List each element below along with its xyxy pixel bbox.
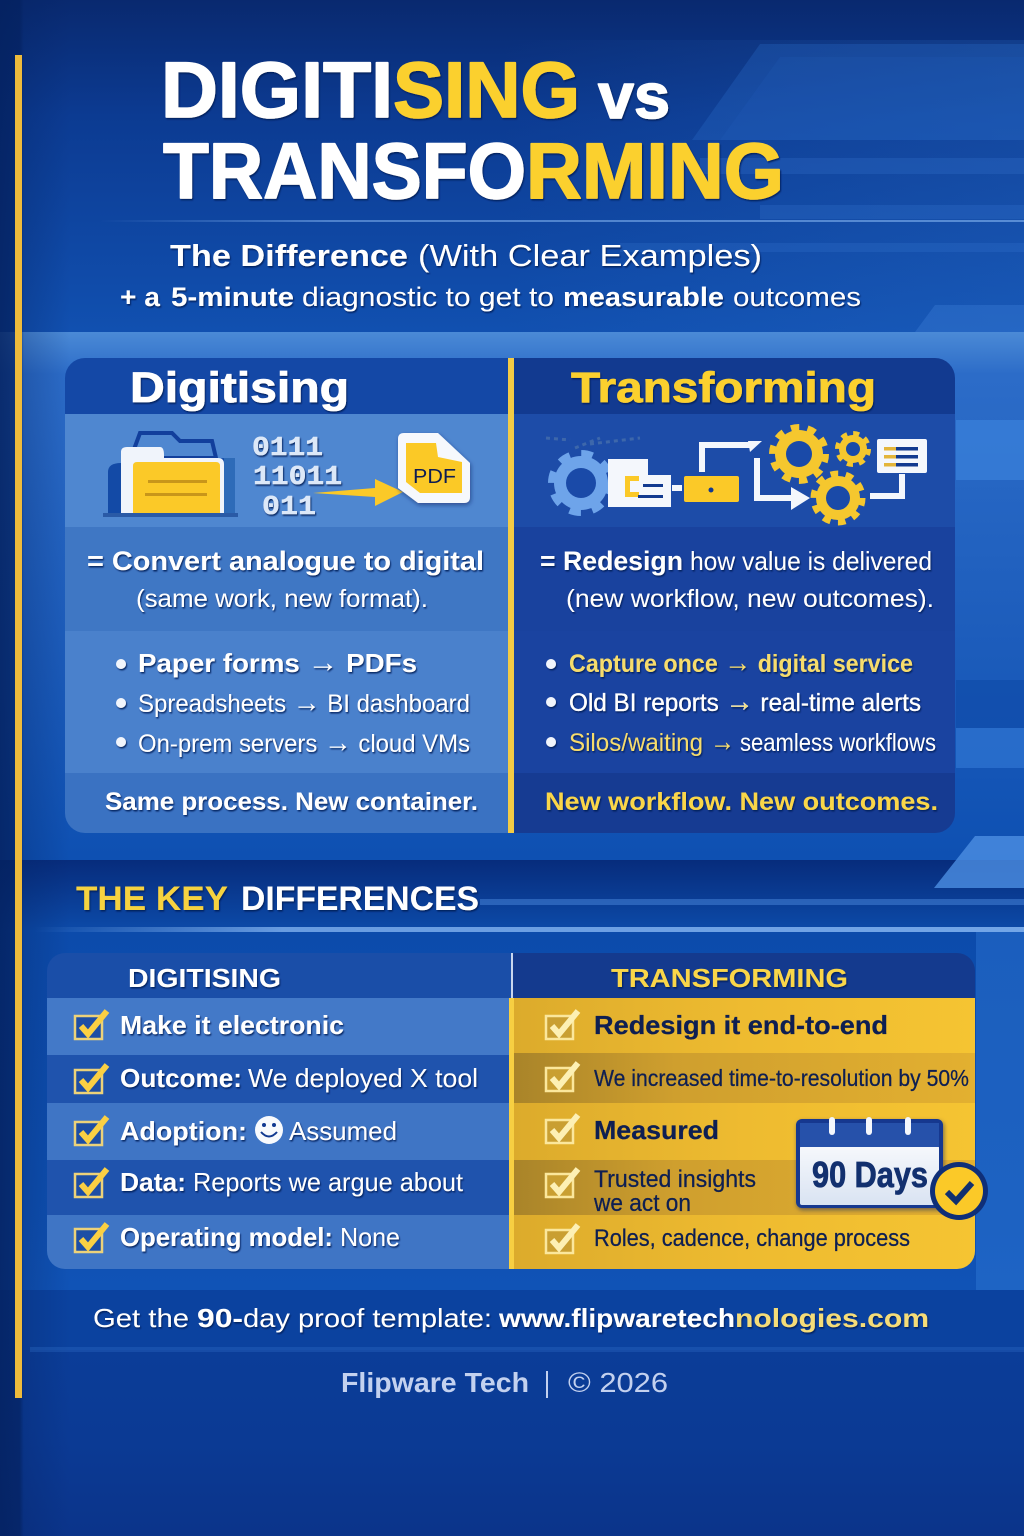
gear: large yellow: [773, 428, 825, 480]
bullets: transforming: Old BI reports → real-time alerts: [569, 686, 921, 718]
rows: transforming: Measured: [594, 1115, 719, 1145]
badge: check: [930, 1162, 988, 1220]
column heading: digitising: DIGITISING: [128, 963, 281, 993]
arrow: binary to pdf: [313, 479, 403, 506]
subtitle: outcomes: [733, 282, 861, 312]
binary digits: 0111: [252, 434, 323, 464]
definition: digitising: (same work, new format).: [136, 585, 428, 613]
rows: digitising: Assumed: [289, 1116, 397, 1146]
rows: transforming: Roles, cadence, change process: [594, 1225, 910, 1252]
call to action: www.flipwaretech: [498, 1303, 735, 1333]
rows: digitising: Reports we argue about: [193, 1167, 464, 1197]
footer: [341, 1367, 668, 1398]
column heading: transforming: TRANSFORMING: [611, 963, 848, 993]
call to action: 90-: [197, 1303, 243, 1333]
definition: transforming: how value is delivered: [690, 546, 932, 576]
icon: 90 days calendar: 90 Days: [812, 1154, 928, 1195]
binary digits: 11011: [253, 463, 342, 493]
rows: transforming: [593, 1010, 969, 1252]
rows: transforming: Trusted insights: [594, 1166, 756, 1193]
bullets: transforming: [546, 647, 936, 758]
heading: digitising: Digitising: [130, 364, 349, 412]
arrow: down to gears: [757, 458, 810, 510]
icon: folder: [103, 433, 238, 517]
footer: Flipware Tech: [341, 1367, 529, 1398]
bullets: transforming: →: [710, 726, 735, 758]
definition: digitising: [87, 546, 484, 613]
subtitle: [120, 238, 861, 312]
panel divider: [508, 358, 514, 833]
rows: transforming: We increased time-to-resolution by 50%: [594, 1065, 969, 1091]
tagline: digitising: Same process. New container.: [105, 788, 478, 816]
bullets: transforming: Silos/waiting: [569, 729, 703, 757]
bullets: digitising: Spreadsheets → BI dashboard: [138, 687, 470, 719]
device: yellow box: [684, 476, 739, 502]
rows: digitising: Operating model:: [120, 1222, 333, 1252]
title: RMING: [526, 126, 784, 215]
definition: transforming: [540, 546, 934, 613]
subtitle: diagnostic to get to: [302, 282, 554, 312]
rows: digitising: Adoption:: [120, 1116, 247, 1146]
left accent bar: [15, 55, 22, 1398]
data dots: [546, 438, 640, 448]
call to action: day proof template:: [243, 1303, 492, 1333]
title: [161, 45, 784, 215]
binary digits: [252, 434, 342, 523]
subtitle: + a: [120, 282, 161, 312]
call to action: nologies.com: [735, 1303, 929, 1333]
panel backgrounds: [65, 358, 955, 833]
definition: transforming: = Redesign: [540, 546, 683, 576]
icon: 90 days calendar: [796, 1117, 988, 1220]
title: vs: [598, 60, 670, 132]
bullets: transforming: seamless workflows: [740, 729, 936, 757]
comparison table: [47, 953, 988, 1269]
table divider: [509, 998, 514, 1269]
section heading: DIFFERENCES: [241, 880, 479, 918]
call to action: Get the: [93, 1303, 189, 1333]
tagline: transforming: New workflow. New outcomes.: [545, 788, 938, 816]
title: DIGITI: [161, 45, 393, 134]
rows: digitising: Data:: [120, 1167, 186, 1197]
rows: transforming: we act on: [593, 1190, 691, 1217]
comparison panel: [65, 358, 955, 833]
definition: transforming: (new workflow, new outcomes).: [566, 585, 934, 613]
rows: digitising: Outcome:: [120, 1063, 242, 1093]
subtitle: 5-minute: [171, 282, 294, 312]
arrow: up and across: [702, 441, 762, 472]
gear: lower yellow: [814, 474, 862, 522]
checkboxes: digitising: [75, 1011, 107, 1252]
gear: small yellow: [838, 434, 868, 464]
title: SING: [393, 45, 580, 134]
icon: smiley: [255, 1116, 283, 1144]
rows: digitising: Make it electronic: [120, 1010, 344, 1040]
table backgrounds: [47, 953, 975, 1269]
subtitle: (With Clear Examples): [418, 238, 762, 273]
footer: © 2026: [568, 1367, 668, 1398]
subtitle: measurable: [563, 282, 724, 312]
bullets: digitising: [116, 647, 470, 759]
connector: gear to document: [870, 474, 902, 496]
icon: workflow with gears: [546, 428, 927, 522]
bullets: digitising: On-prem servers → cloud VMs: [138, 727, 470, 759]
document: left: [608, 459, 671, 507]
bullets: digitising: Paper forms → PDFs: [138, 647, 417, 679]
icon: pdf document: [398, 433, 470, 503]
section heading: THE KEY: [76, 880, 228, 918]
section heading: [76, 880, 479, 918]
binary digits: 011: [262, 493, 316, 523]
subtitle: The Difference: [170, 238, 408, 273]
gear: blue: [552, 454, 610, 512]
rows: digitising: We deployed X tool: [248, 1063, 478, 1093]
rows: transforming: Redesign it end-to-end: [594, 1010, 888, 1040]
title: TRANSFO: [163, 126, 526, 215]
rows: digitising: None: [340, 1222, 400, 1252]
icon: pdf document: PDF: [413, 466, 456, 488]
checkboxes: transforming: [546, 1011, 578, 1253]
rows: digitising: [120, 1010, 478, 1252]
heading: transforming: Transforming: [571, 364, 876, 412]
bullets: transforming: Capture once → digital service: [569, 647, 913, 679]
document: right: [877, 439, 927, 473]
definition: digitising: = Convert analogue to digital: [87, 546, 484, 576]
call to action: [93, 1303, 929, 1333]
